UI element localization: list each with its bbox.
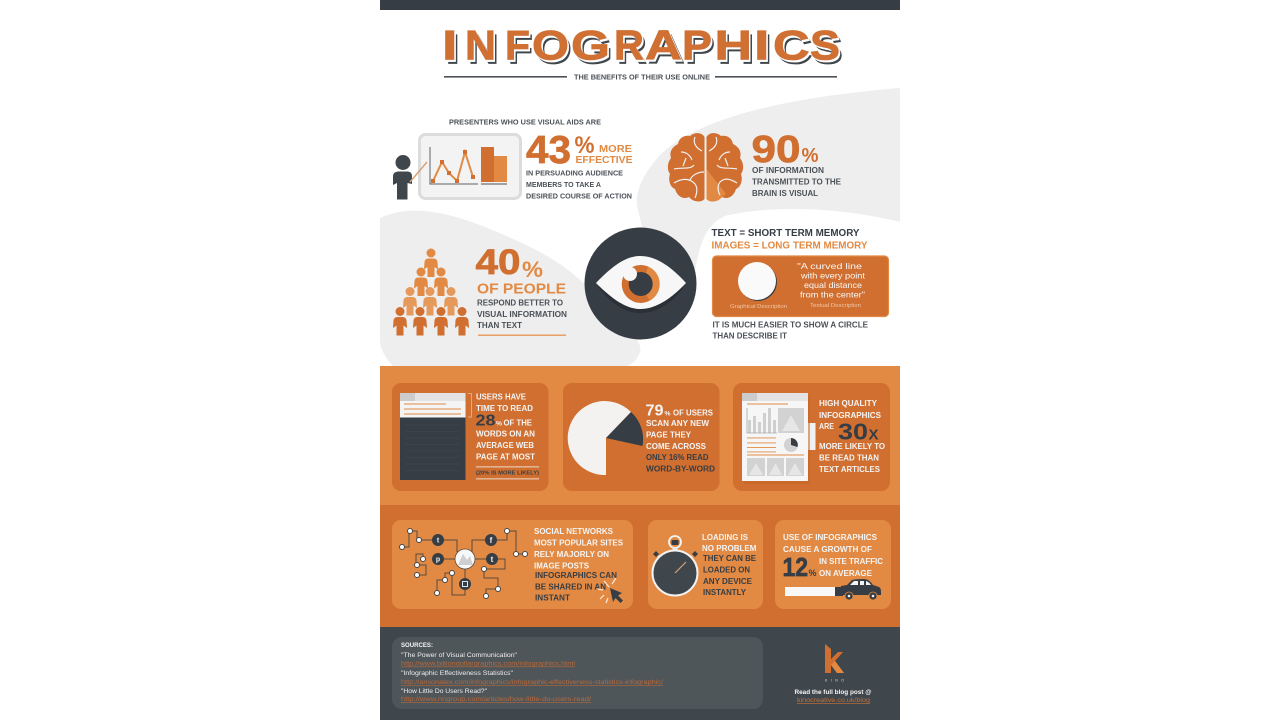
statistic: 43 percent more effective: EFFECTIVE <box>576 154 632 166</box>
traffic text: USE OF INFOGRAPHICS <box>783 533 877 542</box>
social networks text <box>534 527 623 602</box>
loading text: INSTANTLY <box>703 588 747 597</box>
card: loading <box>648 520 763 609</box>
brain description: OF INFORMATION <box>752 166 824 175</box>
presenters intro text: PRESENTERS WHO USE VISUAL AIDS ARE <box>449 118 601 126</box>
30x text: MORE LIKELY TO <box>819 442 885 451</box>
scan text: ONLY 16% READ <box>646 453 709 462</box>
statistic: 40 percent of people: % <box>522 257 543 282</box>
brain description: TRANSMITTED TO THE <box>752 178 841 186</box>
brain description <box>752 166 841 198</box>
source 3 <box>401 689 591 703</box>
title: F <box>505 22 530 68</box>
logo: kino: KINO <box>825 678 844 682</box>
card: social networks <box>392 520 633 609</box>
memory conclusion: THAN DESCRIBE IT <box>712 332 787 340</box>
source 2: "Infographic Effectiveness Statistics" <box>401 671 513 677</box>
source 1: "The Power of Visual Communication" <box>401 653 517 659</box>
pie chart <box>568 401 643 475</box>
icon: facebook: f <box>490 536 493 545</box>
30x text: ARE <box>819 422 834 431</box>
circle quote: with every point <box>800 270 866 280</box>
statistic: 40 percent of people: OF PEOPLE <box>477 282 566 298</box>
blog link <box>794 689 872 704</box>
circle quote: from the center" <box>800 290 865 300</box>
title: P <box>682 22 712 68</box>
users read text <box>476 392 539 479</box>
brain description: BRAIN IS VISUAL <box>752 189 818 198</box>
panel: 40 percent of people <box>393 243 567 336</box>
users read text: WORDS ON AN <box>476 430 535 438</box>
users read text: TIME TO READ <box>476 404 533 413</box>
scan text: WORD-BY-WORD <box>646 464 715 474</box>
loading text: THEY CAN BE <box>703 554 756 563</box>
users read text: (20% IS MORE LIKELY) <box>476 470 539 476</box>
statistic: 43 percent more effective <box>526 129 632 172</box>
title: I <box>754 22 770 68</box>
30x text: X <box>868 426 878 444</box>
title: I <box>442 22 458 68</box>
presenters description: DESIRED COURSE OF ACTION <box>526 192 632 200</box>
icon: instagram <box>459 578 471 590</box>
icon: social network diagram <box>400 528 528 598</box>
presenters description <box>526 168 632 200</box>
statistic: 43 percent more effective: % <box>574 132 594 159</box>
people description: VISUAL INFORMATION <box>477 310 567 319</box>
icon: pyramid of people <box>393 248 469 336</box>
circle quote: "A curved line <box>797 261 862 271</box>
title: R <box>614 22 644 68</box>
circle description card <box>712 256 888 316</box>
scan text: 79 <box>646 402 664 420</box>
memory headings: TEXT = SHORT TERM MEMORY <box>712 227 860 239</box>
social networks text: RELY MAJORLY ON <box>534 550 609 559</box>
social networks text: BE SHARED IN AN <box>535 582 606 592</box>
30x text: 30 <box>838 418 868 444</box>
icon: car with speed bar <box>785 579 881 600</box>
social networks text: INFOGRAPHICS CAN <box>535 571 617 580</box>
source 3: "How Little Do Users Read?" <box>401 689 487 695</box>
people description: RESPOND BETTER TO <box>477 298 563 308</box>
traffic text: % <box>808 568 816 578</box>
users read text: % <box>496 422 503 428</box>
panel: sources <box>392 637 763 709</box>
30x text <box>819 399 885 474</box>
source 2: http://ansonalex.com/infographics/infographic-effectiveness-statistics-infographic/ <box>401 680 663 686</box>
social networks text: INSTANT <box>535 594 570 602</box>
loading text: NO PROBLEM <box>702 544 756 553</box>
icon: pinterest: p <box>436 556 440 564</box>
users read text: AVERAGE WEB <box>476 441 534 450</box>
statistic: 40 percent of people: 40 <box>476 243 520 282</box>
users read text: OF THE <box>504 418 532 428</box>
source 1: http://www.billiondollargraphics.com/infographics.html <box>401 662 575 668</box>
people description <box>477 298 567 336</box>
title <box>442 22 840 68</box>
statistic: 43 percent more effective: MORE <box>599 143 632 155</box>
traffic text: 12 <box>782 552 808 582</box>
icon: stopwatch <box>652 536 698 596</box>
section background: sources footer <box>380 627 900 720</box>
subtitle with rules: THE BENEFITS OF THEIR USE ONLINE <box>574 72 710 82</box>
blog link: Read the full blog post @ <box>794 689 872 696</box>
statistic: 43 percent more effective: 43 <box>526 129 571 172</box>
presenters description: MEMBERS TO TAKE A <box>526 180 602 189</box>
source 2 <box>401 671 663 686</box>
logo: kino <box>825 644 844 682</box>
users read text: 28 <box>476 412 496 430</box>
icon: infographic document <box>742 393 816 484</box>
section background: dark orange <box>380 505 900 627</box>
panel: memory <box>712 227 888 340</box>
scan text: PAGE THEY <box>646 430 692 440</box>
traffic text: CAUSE A GROWTH OF <box>783 545 872 554</box>
memory conclusion <box>712 320 868 340</box>
title: H <box>714 22 752 68</box>
scan text: SCAN ANY NEW <box>646 419 710 428</box>
memory headings: IMAGES = LONG TERM MEMORY <box>712 240 868 252</box>
panel: presenters <box>393 118 632 200</box>
traffic text: IN SITE TRAFFIC <box>819 557 883 566</box>
graphical caption: Graphical Description <box>730 304 787 310</box>
card: 79 percent scan <box>563 383 720 491</box>
traffic text <box>782 533 883 582</box>
statistic: 90 percent: 90 <box>752 129 800 171</box>
social networks text: MOST POPULAR SITES <box>534 538 623 548</box>
scan text: COME ACROSS <box>646 442 706 451</box>
loading text <box>702 533 756 597</box>
source 1 <box>401 653 575 668</box>
icon: web page document <box>400 393 472 480</box>
30x text: INFOGRAPHICS <box>819 411 881 420</box>
title: A <box>645 22 682 68</box>
icon: white circle <box>738 262 777 301</box>
memory headings <box>712 227 868 252</box>
blog link: kinocreative.co.uk/blog <box>797 697 870 704</box>
card: users read 28 percent <box>392 383 548 491</box>
icon: cursor click <box>598 578 623 603</box>
textual caption: Textual Description <box>810 303 861 309</box>
source 3: http://www.nngroup.com/articles/how-little-do-users-read/ <box>401 697 591 703</box>
users read text: USERS HAVE <box>476 392 526 402</box>
card: traffic growth <box>775 520 891 609</box>
statistic: 40 percent of people <box>476 243 566 298</box>
scan text: OF USERS <box>673 408 713 418</box>
icon: presenter figure <box>393 155 427 200</box>
social networks text: SOCIAL NETWORKS <box>534 527 613 536</box>
social networks text: IMAGE POSTS <box>534 562 589 570</box>
title: G <box>571 22 610 68</box>
panel: brain statistic <box>668 129 841 201</box>
loading text: LOADING IS <box>702 533 748 542</box>
statistic: 90 percent <box>752 129 819 171</box>
background shape: lower left <box>380 211 641 366</box>
icon: brain <box>668 133 743 201</box>
section background: light orange <box>380 366 900 505</box>
loading text: LOADED ON <box>703 566 750 574</box>
30x text: TEXT ARTICLES <box>819 465 880 474</box>
background shape: upper right <box>637 88 900 270</box>
icon: tumblr: t <box>491 555 494 564</box>
icon: eye <box>584 228 696 340</box>
30x text: BE READ THAN <box>819 454 879 462</box>
icon: presentation screen with chart <box>420 134 520 198</box>
title: O <box>532 22 569 68</box>
people description: THAN TEXT <box>477 321 522 330</box>
circle quote <box>797 261 866 300</box>
traffic text: ON AVERAGE <box>819 569 872 578</box>
loading text: ANY DEVICE <box>703 577 752 586</box>
top bar <box>380 0 900 10</box>
scan text: % <box>664 412 671 418</box>
title: S <box>810 22 840 68</box>
sources heading: SOURCES: <box>401 643 433 649</box>
users read text: PAGE AT MOST <box>476 452 535 462</box>
memory conclusion: IT IS MUCH EASIER TO SHOW A CIRCLE <box>712 320 868 330</box>
title: N <box>465 22 496 68</box>
presenters description: IN PERSUADING AUDIENCE <box>526 168 623 178</box>
icon: twitter: t <box>437 538 440 544</box>
statistic: 90 percent: % <box>802 145 819 167</box>
30x text: HIGH QUALITY <box>819 399 878 408</box>
scan text <box>646 402 715 474</box>
title: C <box>773 22 810 68</box>
circle quote: equal distance <box>804 280 862 290</box>
card: 30x more likely <box>733 383 890 491</box>
